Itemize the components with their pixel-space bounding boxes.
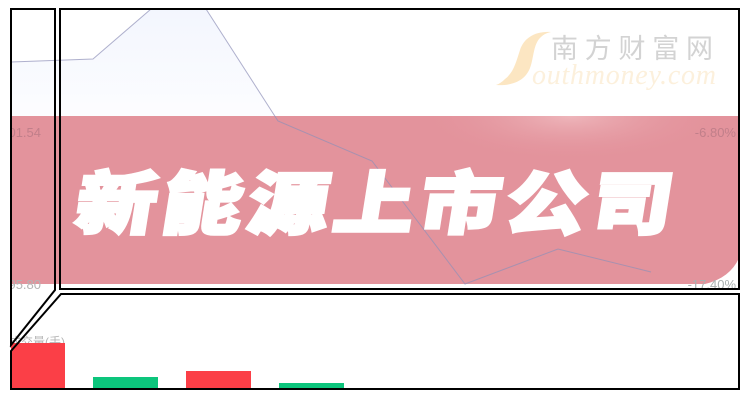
pink banner (12, 116, 738, 284)
axis label: right bottom: -17.40% (688, 277, 736, 292)
title: 新能源上市公司 (70, 150, 687, 248)
panel: main chart frame (60, 9, 739, 289)
axis labels: left (12, 128, 40, 289)
line chart (11, 9, 651, 284)
panel: volume frame (11, 294, 739, 389)
panel: left column frame (11, 9, 55, 345)
icon: swoosh S (496, 32, 551, 85)
logo: southmoney (496, 27, 716, 91)
logo domain: outhmoney.com (532, 60, 716, 91)
axis label: left bottom: 295.80 (1, 277, 41, 292)
volume bars (11, 343, 344, 390)
chart area fill (11, 9, 300, 121)
axis label: left top: 301.54 (1, 125, 41, 140)
volume label: 成交量(手) (9, 334, 65, 349)
logo chinese name: 南方财富网 (551, 27, 713, 66)
axis label: right top: -6.80% (695, 125, 736, 140)
